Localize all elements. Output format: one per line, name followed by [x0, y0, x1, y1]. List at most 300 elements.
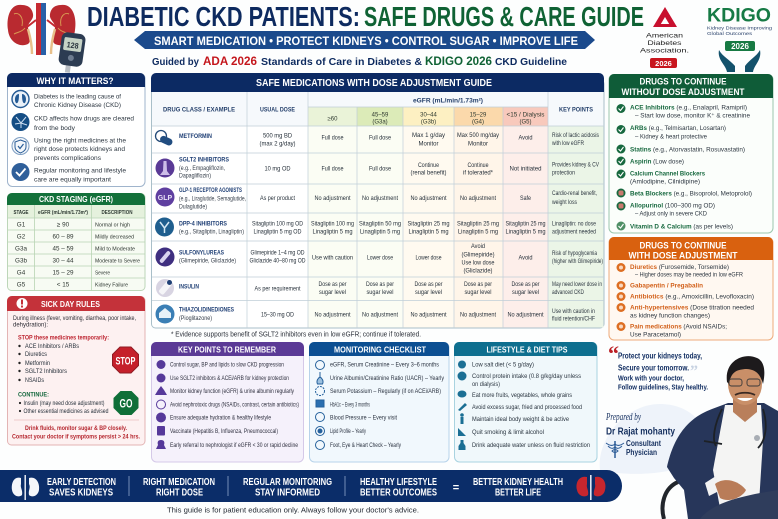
table rows: 15 – 29	[52, 270, 74, 276]
stop list: ACE Inhibitors / ARBs	[25, 343, 79, 350]
warning text: Drink fluids, monitor sugar & BP closely.	[25, 425, 127, 432]
text: reason two: from the body	[34, 125, 76, 132]
row: GLP-1 receptor agonists: Cardio-renal benefit,	[552, 191, 597, 197]
icons: purple markers	[155, 360, 167, 449]
row: GLP-1 receptor agonists: As per product	[260, 195, 295, 202]
row: SGLT2 inhibitors: protection	[552, 170, 575, 176]
row: insulin: INSULIN	[179, 284, 199, 290]
icon: GLP badge: GLP	[158, 195, 173, 202]
icon: check badge	[12, 163, 30, 181]
table rows: 60 – 89	[52, 234, 74, 240]
row: sulfonylureas: Glimepiride 1–4 mg OD	[250, 250, 305, 256]
text: reason three: right dose protects kidneys and	[34, 146, 125, 153]
message: healthy lifestyle: HEALTHY LIFESTYLE	[360, 477, 437, 488]
icon: go sign: GO	[120, 398, 133, 410]
logo: American Diabetes Association	[640, 7, 689, 68]
row: insulin: May need lower dose in	[552, 282, 602, 288]
icon: TZD	[156, 304, 174, 324]
heading: LIFESTYLE & DIET TIPS	[486, 344, 568, 354]
heading: WITHOUT DOSE ADJUSTMENT	[622, 87, 745, 97]
logo: KDIGO: 2026	[731, 42, 749, 51]
row: DPP-4 inhibitors: Sitagliptin 100 mg OD	[252, 220, 303, 228]
ribbon subtitle: SMART MEDICATION • PROTECT KIDNEYS • CONTROL SUGAR • IMPROVE LIFE	[154, 36, 578, 48]
stop list: Metformin	[25, 360, 50, 367]
message: regular monitoring: STAY INFORMED	[255, 488, 320, 498]
icon: glucose meter: 128	[66, 40, 80, 51]
drug list: (Amlodipine, Cilnidipine)	[630, 178, 700, 186]
row: insulin: As per requirement	[254, 286, 301, 292]
stop list	[18, 334, 109, 384]
logo: KDIGO: Global Outcomes	[707, 31, 753, 36]
row: SGLT2 inhibitors: 10 mg OD	[264, 166, 291, 172]
drug list	[630, 104, 752, 230]
guideline line: Guided by	[152, 56, 199, 68]
row: SGLT2 inhibitors: Full dose	[322, 166, 344, 172]
row: metformin: Monitor	[418, 140, 438, 148]
logo: KDIGO: KDIGO	[707, 6, 771, 26]
row: DPP-4 inhibitors: Linagliptin 5 mg	[408, 228, 449, 236]
table rows: G5	[17, 282, 26, 288]
tips list: Eat more fruits, vegetables, whole grains	[472, 392, 572, 399]
icon: kidney badge	[12, 90, 29, 108]
message: early detection: SAVES KIDNEYS	[49, 488, 113, 498]
row: GLP-1 receptor agonists: Dulaglutide)	[179, 204, 207, 210]
tips list: Low salt diet (< 5 g/day)	[472, 362, 534, 368]
row: sulfonylureas: SULFONYLUREAS	[179, 250, 225, 256]
icons: lifestyle markers	[458, 360, 467, 450]
table rows: Moderate to Severe	[95, 258, 140, 264]
row: DPP-4 inhibitors	[155, 218, 597, 236]
drug list: Allopurinol (100–300 mg OD)	[630, 202, 715, 210]
row: sulfonylureas: Use with caution	[312, 254, 353, 262]
row: GLP-1 receptor agonists: weight loss	[551, 200, 577, 206]
heading: WITH DOSE ADJUSTMENT	[628, 250, 738, 260]
disclaimer: This guide is for patient education only. Always follow your doctor's advice.	[167, 506, 419, 514]
row: sulfonylureas: Lower dose	[416, 254, 442, 262]
icon: alert	[16, 298, 28, 309]
illustration: doctor portrait	[600, 356, 778, 519]
row: sulfonylureas: (Glimepiride)	[462, 252, 494, 258]
row: SGLT2 inhibitors	[156, 156, 599, 180]
text: reason three: prevents complications	[34, 155, 102, 162]
table title: SAFE MEDICATIONS WITH DOSE ADJUSTMENT GUIDE	[256, 77, 492, 89]
table header row: 30–44	[420, 112, 438, 118]
row: DPP-4 inhibitors: (e.g., Sitagliptin, Linagliptin)	[179, 228, 244, 236]
table rows: Mild to Moderate	[95, 246, 135, 252]
row: DPP-4 inhibitors: Sitagliptin 25 mg	[506, 220, 546, 228]
row: SGLT2 inhibitors: Provides kidney & CV	[552, 162, 599, 168]
drug list: – Adjust only in severe CKD	[635, 210, 707, 218]
key points list: Monitor kidney function (eGFR) & urine albumin regularly	[170, 389, 294, 395]
checklist: eGFR, Serum Creatinine – Every 3–6 months	[330, 362, 439, 368]
guideline line	[152, 54, 567, 68]
table header row: DRUG CLASS / EXAMPLE	[163, 106, 236, 114]
row: DPP-4 inhibitors: DPP-4 INHIBITORS	[179, 220, 228, 228]
message: right medication	[143, 477, 215, 498]
table header row: eGFR (mL/min/1.73m²)	[413, 98, 483, 104]
text: reason one	[34, 94, 121, 109]
panel: safe medications table	[151, 73, 604, 328]
row: DPP-4 inhibitors: Sitagliptin 25 mg	[457, 220, 500, 228]
row: metformin	[156, 130, 599, 148]
icon: drug clearance	[12, 113, 30, 131]
row: metformin: METFORMIN	[179, 133, 212, 140]
heading	[628, 240, 738, 260]
row: insulin	[156, 279, 602, 297]
table rows: G3a	[15, 246, 27, 252]
row: GLP-1 receptor agonists: No adjustment	[314, 195, 351, 202]
title: SAFE DRUGS & CARE GUIDE	[364, 1, 644, 32]
icon: shield check	[12, 138, 29, 154]
logo: KDIGO	[707, 6, 773, 72]
author credit: Prepared by	[605, 412, 641, 423]
table rows: G1	[17, 222, 26, 228]
drug list: Use Paracetamol)	[630, 332, 681, 338]
heading: DRUGS TO CONTINUE	[640, 76, 727, 86]
table header	[14, 209, 133, 216]
message: early detection	[47, 477, 116, 498]
row: GLP-1 receptor agonists: No adjustment	[410, 195, 447, 202]
row: GLP-1 receptor agonists	[156, 187, 597, 210]
continue list: Other essential medicines as advised	[24, 409, 108, 415]
drug list: Aspirin (Low dose)	[630, 158, 684, 166]
warning text	[12, 425, 140, 440]
message: regular monitoring	[243, 477, 332, 498]
drug list: Statins (e.g., Atorvastatin, Rosuvastatin)	[630, 146, 745, 154]
heading: CKD STAGING (eGFR)	[39, 194, 113, 204]
row: insulin: Dose as per	[366, 281, 394, 288]
message: healthy lifestyle	[360, 477, 437, 498]
row: SGLT2 inhibitors: Not initiated	[510, 166, 542, 172]
table header: STAGE	[14, 210, 29, 216]
row: sulfonylureas: Avoid	[518, 254, 533, 262]
drug list: – Higher doses may be needed in low eGFR	[635, 272, 743, 278]
row: thiazolidinediones	[156, 304, 595, 324]
row: thiazolidinediones: THIAZOLIDINEDIONES	[179, 306, 235, 314]
title: DIABETIC CKD PATIENTS:	[87, 1, 360, 32]
message: better kidney health: BETTER KIDNEY HEALTH	[473, 477, 563, 488]
message: healthy lifestyle: BETTER OUTCOMES	[360, 488, 437, 498]
stop list: NSAIDs	[25, 377, 44, 384]
checklist: Lipid Profile – Yearly	[330, 428, 367, 435]
panel: CKD staging	[7, 193, 145, 291]
row: metformin: Full dose	[322, 134, 344, 142]
checklist: Foot, Eye & Heart Check – Yearly	[330, 442, 402, 449]
key points list	[170, 362, 299, 449]
quote: Work with your doctor,	[618, 374, 684, 382]
row: insulin: sugar level	[415, 289, 442, 296]
table header row: USUAL DOSE	[260, 106, 295, 114]
logo: American Diabetes Association: American	[646, 32, 683, 40]
stop list: Diuretics	[25, 351, 47, 358]
table rows: < 15	[57, 282, 70, 288]
message: regular monitoring: REGULAR MONITORING	[243, 477, 332, 488]
row: GLP-1 receptor agonists: No adjustment	[460, 195, 496, 202]
icon: DPP-4	[155, 218, 174, 236]
row: insulin: advanced CKD	[552, 290, 585, 296]
row: insulin: sugar level	[512, 289, 539, 296]
warning text: Contact your doctor if symptoms persist > 24 hrs.	[12, 434, 140, 440]
row: DPP-4 inhibitors: Linagliptin 5 mg	[360, 228, 401, 236]
message: early detection: EARLY DETECTION	[47, 477, 116, 488]
icon: go sign	[114, 391, 138, 415]
table rows: 30 – 44	[52, 258, 74, 264]
row: metformin: Avoid	[518, 134, 533, 142]
row: metformin: Max 500 mg/day	[457, 132, 500, 139]
drug list: Calcium Channel Blockers	[630, 170, 705, 178]
row: DPP-4 inhibitors: Linagliptin 5 mg	[312, 228, 353, 236]
table rows: G3b	[15, 258, 27, 264]
row: metformin: Risk of lactic acidosis	[552, 133, 599, 139]
icon: kidneys illustration	[8, 3, 75, 55]
row: insulin: Dose as per	[512, 281, 540, 288]
message: right medication: RIGHT MEDICATION	[143, 477, 215, 488]
icon: red kidneys	[576, 475, 606, 500]
table rows	[15, 222, 140, 288]
row: metformin: (max 2 g/day)	[260, 140, 296, 148]
quote	[608, 341, 708, 392]
icon: insulin pen	[156, 279, 174, 297]
panel: drugs with dose adjustment	[609, 237, 773, 340]
icon: stop sign: STOP	[116, 356, 136, 368]
icon: sulfonylurea	[156, 248, 174, 266]
message: right medication: RIGHT DOSE	[156, 488, 203, 498]
author credit: Consultant	[626, 439, 661, 448]
quote: Follow guidelines, Stay healthy.	[618, 382, 708, 392]
drug list: Pain medications (Avoid NSAIDs;	[630, 324, 727, 330]
heading: MONITORING CHECKLIST	[334, 344, 427, 354]
row: insulin: sugar level	[319, 289, 346, 296]
row: sulfonylureas: Avoid	[471, 243, 486, 250]
logo: American Diabetes Association: Diabetes	[648, 40, 682, 47]
heading: DRUGS TO CONTINUE	[640, 240, 727, 250]
logo: American Diabetes Association: 2026	[655, 59, 672, 68]
panel: why it matters	[7, 73, 145, 186]
table rows: ≥ 90	[57, 222, 70, 228]
icon: caduceus	[606, 441, 624, 458]
table header: DESCRIPTION	[102, 210, 133, 216]
row: thiazolidinediones: No adjustment	[314, 312, 351, 318]
table header row: 15–29	[470, 112, 487, 118]
row: DPP-4 inhibitors: Linagliptin 5 mg	[458, 228, 499, 236]
drug list	[630, 264, 754, 338]
row: metformin: 500 mg BD	[263, 132, 292, 140]
icon: white kidneys	[12, 475, 39, 500]
key points list: Ensure adequate hydration & healthy lifestyle	[170, 416, 272, 422]
author credit: Physician	[626, 448, 657, 457]
panel: drugs without dose adjustment	[609, 74, 773, 233]
text: reason four	[34, 168, 126, 184]
logo: American Diabetes Association: Association.	[640, 48, 689, 54]
row: GLP-1 receptor agonists: (e.g., Liraglutide, Semaglutide,	[179, 196, 246, 202]
table rows: G4	[17, 270, 26, 276]
icon: pills	[156, 130, 174, 147]
row: sulfonylureas	[156, 243, 603, 274]
quote: ”	[690, 363, 698, 380]
heading: WHY IT MATTERS?	[36, 76, 114, 87]
text: reason three	[34, 138, 126, 162]
text: reason four: care are equally important	[34, 176, 111, 184]
table header row: (G3b)	[421, 120, 436, 126]
tips list: Maintain ideal body weight & be active	[472, 416, 570, 423]
row: thiazolidinediones: fluid retention/CHF	[552, 316, 595, 322]
table header row: (G4)	[472, 120, 484, 126]
icons: orange badges	[616, 263, 626, 331]
drug list: Beta Blockers (e.g., Bisoprolol, Metoprolol)	[630, 190, 752, 198]
drug list: Anti-hypertensives (Dose titration needed	[630, 304, 754, 312]
row: insulin: sugar level	[464, 289, 492, 296]
row: thiazolidinediones: No adjustment	[508, 312, 544, 318]
row: DPP-4 inhibitors: Linagliptin 5 mg	[506, 228, 546, 236]
table header row: ≥60	[328, 116, 338, 122]
icons: monitoring markers	[316, 360, 324, 450]
icons: check marks	[616, 104, 626, 230]
key points list: Use SGLT2 inhibitors & ACEi/ARB for kidney protection	[170, 376, 289, 382]
tips list: Drink adequate water unless on fluid restriction	[472, 442, 590, 449]
table header row: 45–59	[372, 112, 389, 118]
row: metformin: Full dose	[369, 134, 391, 142]
quote: Secure your tomorrow.	[618, 364, 689, 372]
row: thiazolidinediones: 15–30 mg OD	[261, 312, 294, 318]
row: DPP-4 inhibitors: Linagliptin 5 mg OD	[254, 228, 302, 236]
row: sulfonylureas: Gliclazide 40–80 mg OD	[250, 258, 306, 264]
table rows: Kidney Failure	[95, 282, 128, 288]
stop list: SGLT2 Inhibitors	[25, 368, 67, 375]
author credit	[605, 412, 675, 458]
icon: glucose meter	[57, 31, 86, 74]
table header row: (G3a)	[372, 120, 388, 126]
continue list	[18, 392, 108, 415]
row: DPP-4 inhibitors: Sitagliptin 100 mg	[311, 220, 354, 228]
drug list: Gabapentin / Pregabalin	[630, 282, 703, 290]
tips list: Quit smoking & limit alcohol	[472, 429, 544, 436]
table rows: 45 – 59	[52, 246, 74, 252]
row: thiazolidinediones: Use with caution in	[552, 309, 595, 315]
author credit: Dr Rajat mohanty	[606, 426, 675, 438]
table header row	[163, 98, 594, 126]
table header row: KEY POINTS	[559, 106, 594, 114]
table rows: Mildly decreased	[95, 234, 134, 240]
row: SGLT2 inhibitors: SGLT2 INHIBITORS	[179, 156, 230, 164]
icon: stop sign	[112, 347, 138, 373]
row: thiazolidinediones: (Pioglitazone)	[179, 315, 212, 322]
heading: SICK DAY RULES	[41, 300, 101, 309]
continue list: Insulin (may need dose adjustment)	[24, 401, 104, 407]
tips list	[472, 362, 590, 449]
text: reason one: Chronic Kidney Disease (CKD)	[34, 102, 121, 109]
row: metformin: with low eGFR	[551, 141, 585, 147]
message: better kidney health	[473, 477, 563, 498]
checklist	[330, 362, 445, 449]
drug list: ARBs (e.g., Telmisartan, Losartan)	[630, 125, 726, 132]
message: better kidney health: BETTER LIFE	[495, 488, 541, 498]
table rows: Severe	[95, 270, 110, 276]
guideline line: Standards of Care in Diabetes &	[261, 56, 422, 68]
guideline line: ADA 2026	[203, 54, 257, 68]
bottom banner	[0, 470, 622, 502]
text: reason two	[34, 116, 134, 132]
drug list: Diuretics (Furosemide, Torsemide)	[630, 264, 729, 271]
table header row: <15 / Dialysis	[506, 112, 544, 118]
row: DPP-4 inhibitors: adjustment needed	[552, 230, 596, 236]
row: sulfonylureas: Risk of hypoglycemia	[552, 251, 598, 257]
row: SGLT2 inhibitors: if tolerated*	[463, 170, 494, 176]
icon: GLP badge	[156, 188, 174, 206]
key points list: Control sugar, BP and lipids to slow CKD progression	[170, 362, 284, 368]
row: SGLT2 inhibitors: (renal benefit)	[410, 170, 446, 176]
row: sulfonylureas: Use low dose	[462, 260, 495, 266]
drug list: – Kidney & heart protective	[635, 134, 707, 140]
table rows: G2	[17, 234, 26, 240]
row: insulin: Dose as per	[414, 281, 442, 288]
table header: eGFR (mL/min/1.73m²)	[38, 209, 88, 216]
table rows: Normal or high	[95, 222, 130, 228]
intro text: dehydration):	[13, 322, 48, 328]
heading: KEY POINTS TO REMEMBER	[178, 344, 276, 354]
text: reason three: Using the right medicines at the	[34, 138, 126, 144]
checklist: Urine Albumin/Creatinine Ratio (UACR) – Yearly	[330, 375, 445, 382]
guideline line: KDIGO 2026	[425, 54, 492, 68]
ribbon subtitle	[134, 31, 595, 49]
drug list: – Start low dose, monitor K⁺ & creatinine	[635, 112, 750, 120]
drug list: ACE Inhibitors (e.g., Enalapril, Ramipril)	[630, 104, 747, 112]
panel: key points to remember	[151, 342, 304, 462]
title	[87, 1, 644, 32]
row: sulfonylureas: (higher with Glimepiride)	[552, 259, 603, 265]
heading	[622, 76, 745, 97]
row: metformin: Monitor	[468, 140, 488, 148]
key points list: Early referral to nephrologist if eGFR < 30 or rapid decline	[170, 443, 299, 449]
panel: sick day rules	[7, 296, 145, 445]
row: DPP-4 inhibitors: Sitagliptin 25 mg	[408, 220, 450, 228]
row: DPP-4 inhibitors: Linagliptin: no dose	[552, 222, 597, 228]
intro text	[13, 315, 136, 328]
checklist: Serum Potassium – Regularly (if on ACEi/ARB)	[330, 388, 441, 395]
text: reason two: CKD affects how drugs are cleared	[34, 116, 134, 122]
footnote: * Evidence supports benefit of SGLT2 inhibitors even in low eGFR; continue if tolerated.	[171, 332, 421, 338]
checklist: Blood Pressure – Every visit	[330, 414, 397, 422]
drug list: Vitamin D & Calcium (as per levels)	[630, 224, 733, 230]
row: SGLT2 inhibitors: (e.g., Empagliflozin,	[179, 165, 225, 172]
row: metformin: Max 1 g/day	[412, 132, 446, 139]
panel: lifestyle and diet tips	[454, 342, 597, 462]
row: insulin: sugar level	[366, 289, 394, 296]
row: sulfonylureas: (Glimepiride, Gliclazide)	[179, 258, 236, 264]
row: GLP-1 receptor agonists: No adjustment	[362, 195, 398, 202]
tips list: Control protein intake (0.8 g/kg/day unless	[472, 373, 581, 380]
checklist: HbA1c – Every 3 months	[330, 402, 370, 408]
text: reason one: Diabetes is the leading cause of	[34, 94, 121, 100]
table header row: (G5)	[520, 120, 532, 126]
tips list: Avoid excess sugar, fried and processed food	[472, 404, 582, 411]
quote: “	[608, 341, 619, 366]
row: insulin: Dose as per	[318, 281, 346, 288]
guideline line: CKD Guideline	[495, 56, 567, 68]
icon: SGLT2	[156, 158, 174, 178]
row: sulfonylureas: (Gliclazide)	[464, 268, 492, 274]
drug list: Antibiotics (e.g., Amoxicillin, Levofloxacin)	[630, 294, 754, 300]
row: thiazolidinediones: No adjustment	[460, 312, 496, 318]
quote: Protect your kidneys today,	[618, 352, 702, 360]
row: SGLT2 inhibitors: Full dose	[369, 166, 391, 172]
panel: monitoring checklist	[309, 342, 449, 462]
equals sign: =	[453, 482, 459, 494]
continue list: CONTINUE:	[18, 392, 49, 398]
logo: KDIGO: Kidney Disease Improving	[707, 26, 773, 30]
row: sulfonylureas: Lower dose	[367, 254, 393, 262]
row: SGLT2 inhibitors: Continue	[418, 162, 439, 169]
row: GLP-1 receptor agonists: GLP-1 RECEPTOR AGONISTS	[179, 187, 243, 194]
